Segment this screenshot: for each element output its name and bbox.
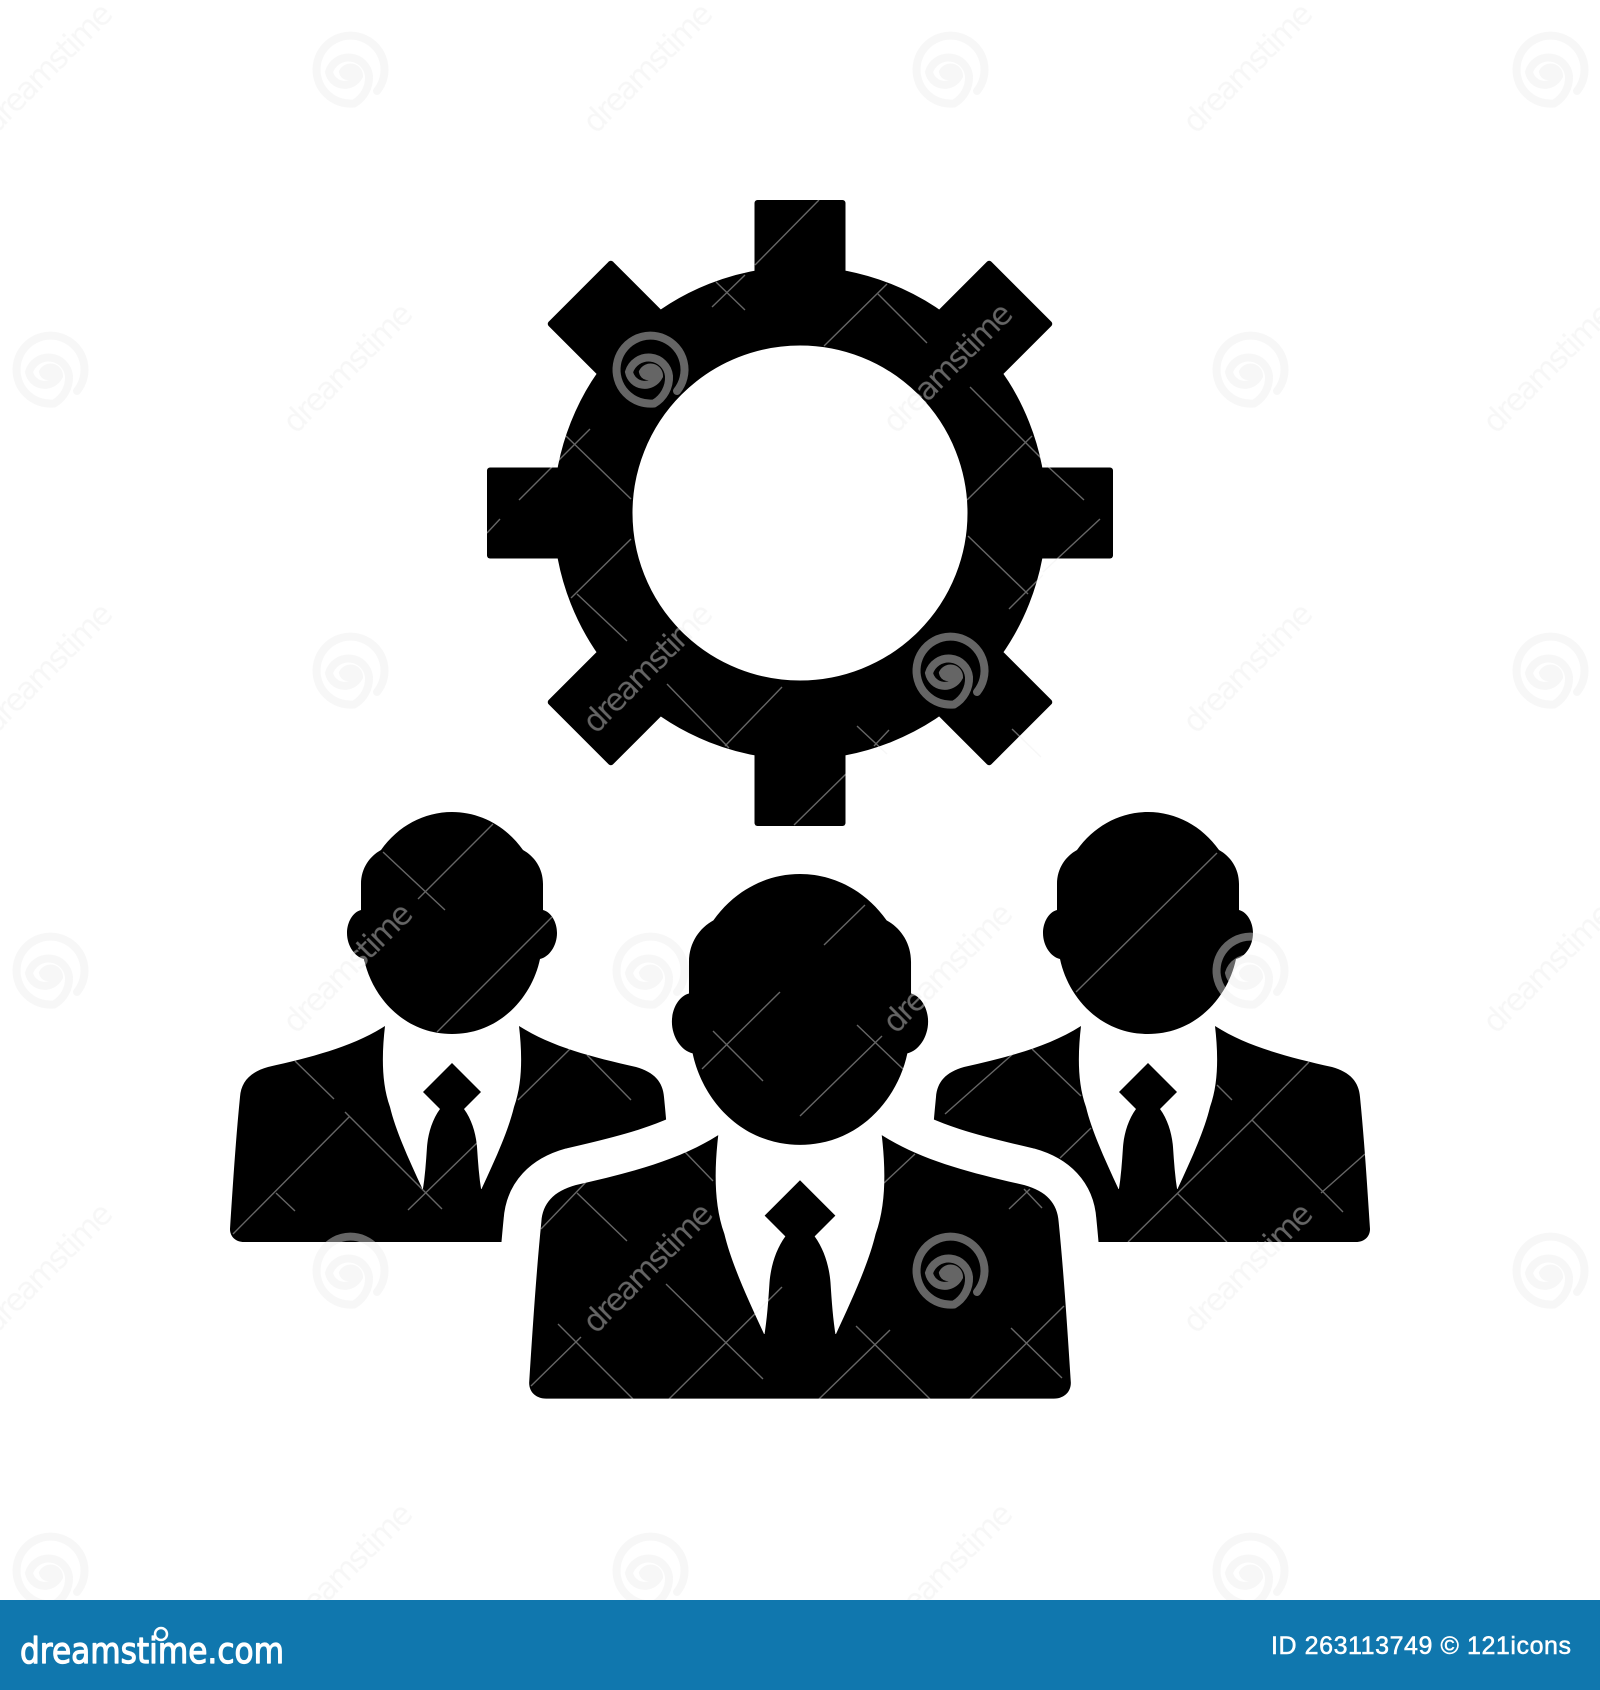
icon: right businessman xyxy=(926,812,1370,1242)
watermark text: dreamstime xyxy=(576,0,720,140)
icon: center businessman xyxy=(529,874,1071,1399)
footer logo text: dreamstime.com xyxy=(20,1631,284,1672)
watermark text: dreamstime xyxy=(876,1496,1020,1640)
watermark text: dreamstime xyxy=(1176,0,1320,140)
watermark text: dreamstime xyxy=(876,896,1020,1040)
watermark text: dreamstime xyxy=(276,296,420,440)
watermark text: dreamstime xyxy=(576,1196,720,1340)
watermark grid lines xyxy=(233,200,1365,1399)
footer band xyxy=(0,1600,1600,1690)
icon: left businessman xyxy=(230,812,674,1242)
watermark text: dreamstime xyxy=(276,896,420,1040)
footer image id and credit: ID 263113749 © 121icons xyxy=(1271,1632,1571,1660)
icon: gear xyxy=(487,200,1113,826)
watermark text: dreamstime xyxy=(576,596,720,740)
watermark text: dreamstime xyxy=(276,1496,420,1640)
watermark text: dreamstime xyxy=(1176,596,1320,740)
watermark text: dreamstime xyxy=(876,296,1020,440)
watermark text: dreamstime xyxy=(1176,1196,1320,1340)
